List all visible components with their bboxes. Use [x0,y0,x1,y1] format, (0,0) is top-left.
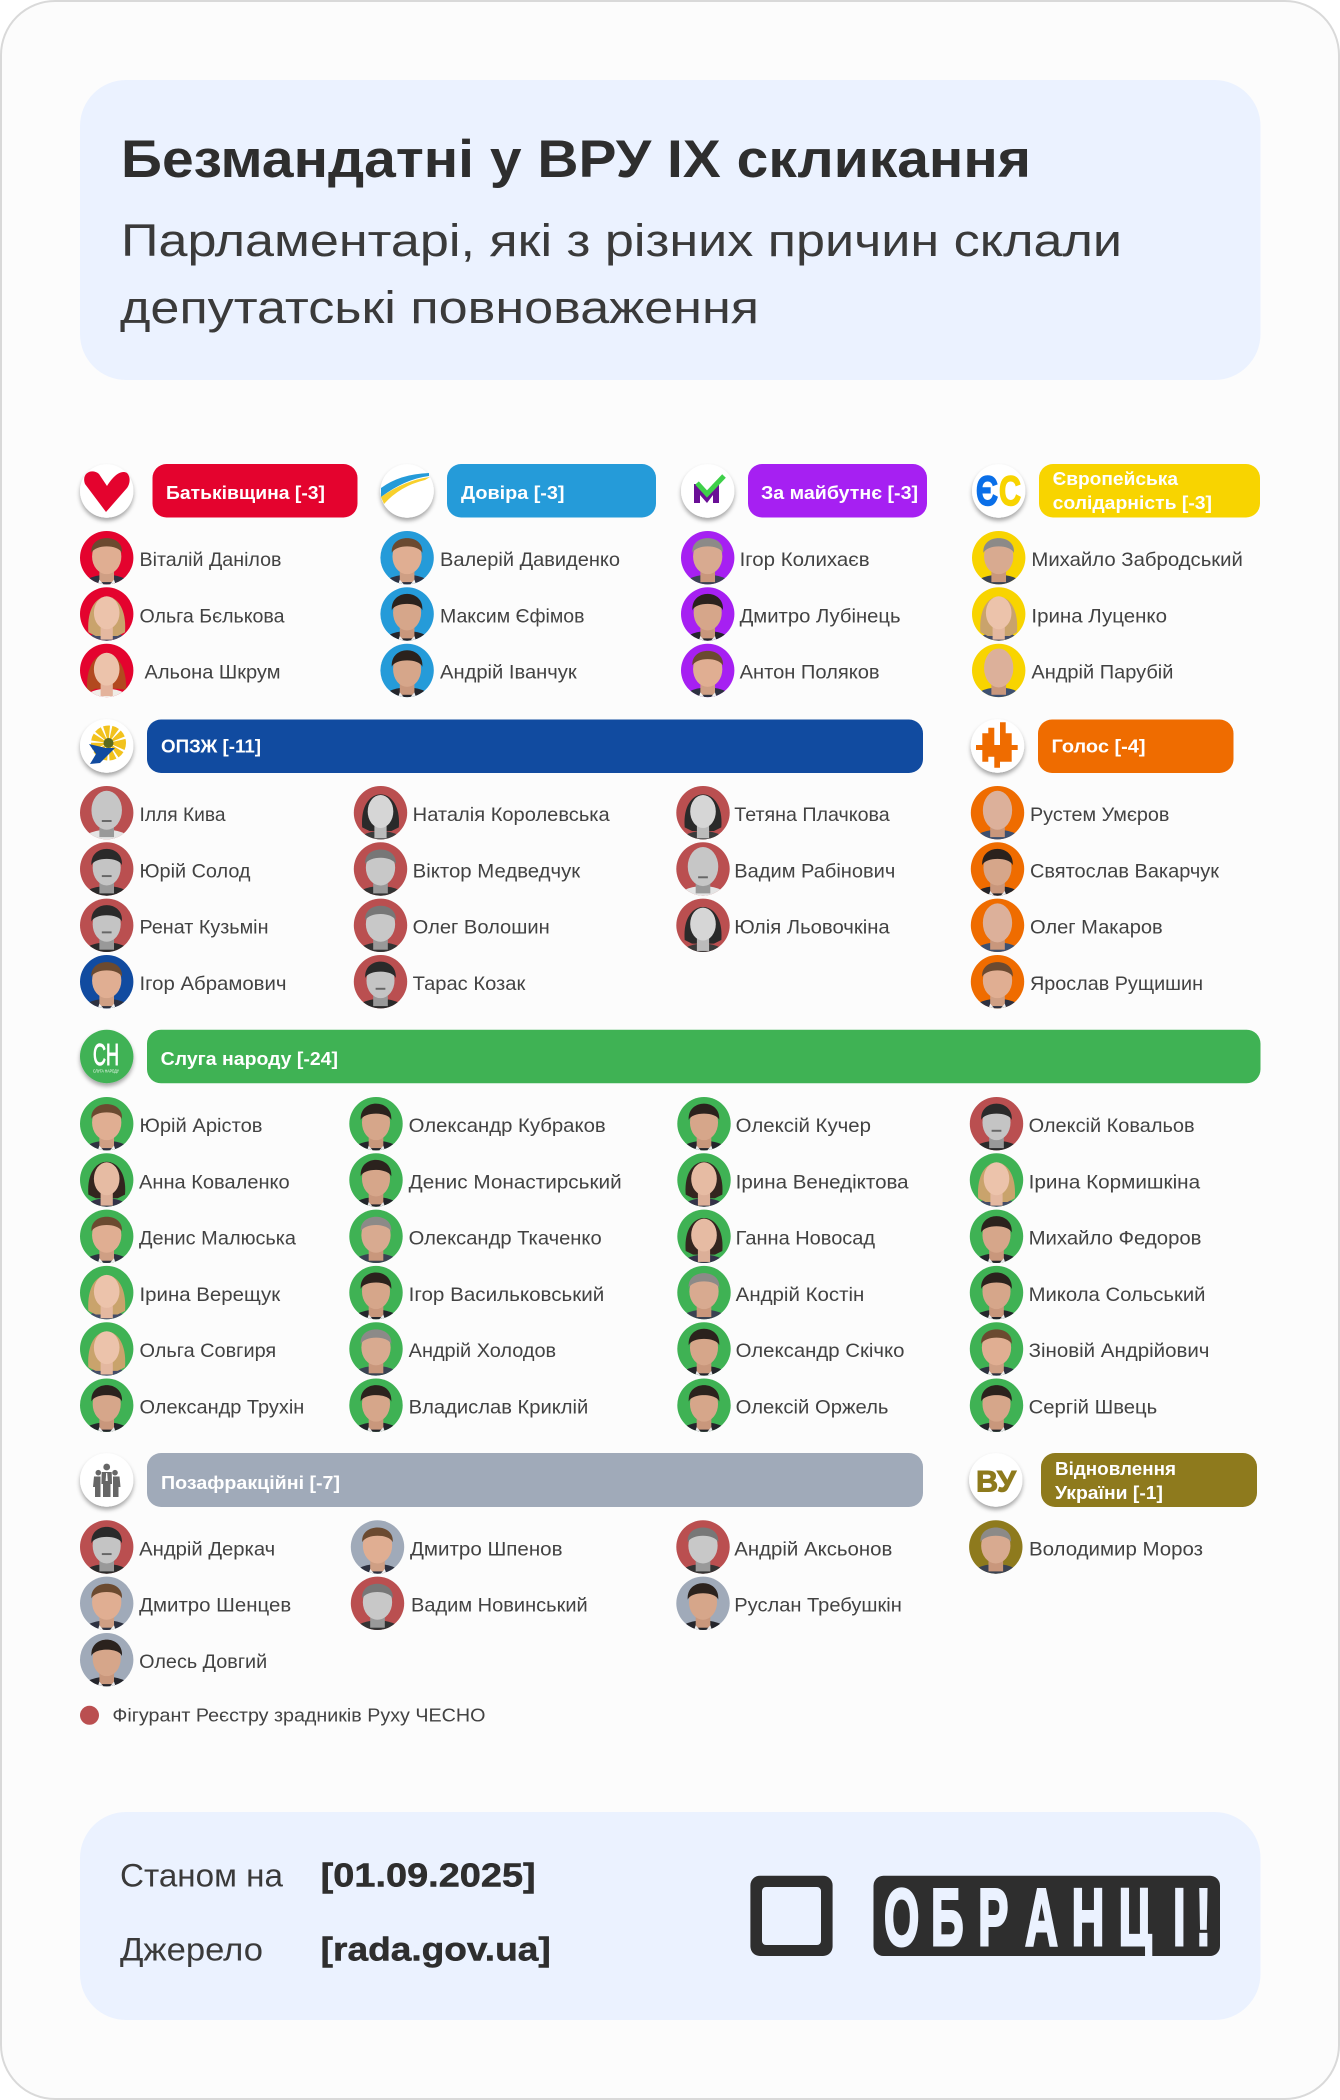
person: Дмитро Шенцев [79,1577,291,1652]
party label: Голос [-4] [1052,736,1146,756]
panel: Голос [969,719,1234,1030]
date label: Станом на [120,1858,283,1894]
party label: Відновлення [1055,1458,1176,1479]
person: Денис Монастирський [348,1153,622,1229]
panel: header [80,80,1260,380]
subtitle: Парламентарі, які з різних причин склали [121,215,1122,266]
panel: Європейська солідарність [971,464,1260,719]
person: Олександр Ткаченко [348,1210,602,1285]
person: Ірина Кормишкіна: Ірина Кормишкіна [1029,1171,1200,1193]
icon: OPZZh sunflower and dove [80,719,133,773]
person: Олександр Трухін: Олександр Трухін [140,1396,304,1418]
person: Віталій Данілов: Віталій Данілов [140,549,282,571]
party label [748,464,927,518]
person: Микола Сольський [968,1266,1206,1341]
person: Михайло Забродський: Михайло Забродський [1031,549,1243,571]
person: Олег Макаров [969,899,1163,974]
person: Ірина Венедіктова: Ірина Венедіктова [736,1171,909,1193]
party label: Слуга народу [-24] [161,1048,338,1069]
party label [1038,720,1234,773]
person: Андрій Холодов: Андрій Холодов [409,1340,556,1362]
party label [1041,1453,1257,1507]
person: Валерій Давиденко: Валерій Давиденко [440,549,620,571]
person: Рустем Умєров [969,786,1169,862]
panel: Позафракційні [79,1453,923,1708]
person: Валерій Давиденко [379,531,620,606]
person: Олександр Скічко [676,1322,905,1398]
person: Святослав Вакарчук: Святослав Вакарчук [1030,860,1219,882]
subtitle: депутатські повноваження [120,282,759,333]
legend: traitor registry: Фігурант Реєстру зрадників Руху ЧЕСНО [112,1706,485,1726]
icon: ES logo [972,464,1025,518]
person: Ганна Новосад [677,1210,876,1284]
logo wordmark: ОБРАНЦІ! [884,1872,1211,1962]
person: Андрій Деркач: Андрій Деркач [139,1538,275,1560]
person: Зіновій Андрійович: Зіновій Андрійович [1029,1340,1210,1362]
person: Олексій Оржель: Олексій Оржель [736,1396,888,1418]
person: Ігор Абрамович [79,955,286,1030]
person: Зіновій Андрійович [968,1322,1210,1398]
title: Безмандатні у ВРУ IX скликання [121,130,1031,189]
party label: ОПЗЖ [-11] [161,736,261,756]
person: Олег Волошин [352,899,550,974]
icon: people group [80,1453,133,1507]
person: Денис Монастирський: Денис Монастирський [409,1171,622,1193]
panel: За майбутнє [680,464,927,719]
person: Олексій Кучер [676,1097,871,1172]
person: Анна Коваленко: Анна Коваленко [139,1171,290,1193]
person: Ірина Венедіктова [677,1153,909,1228]
person: Ігор Колихаєв [680,531,870,606]
person: Ірина Кормишкіна [970,1153,1200,1228]
person: Олексій Оржель [676,1378,888,1454]
person: Альона Шкрум: Альона Шкрум [144,662,280,684]
person: Юрій Арістов: Юрій Арістов [140,1115,262,1137]
person: Микола Сольський: Микола Сольський [1029,1284,1206,1306]
source label: Джерело [120,1932,263,1968]
panel: Слуга народу [79,1030,1260,1454]
person: Ілля Кива: Ілля Кива [140,804,226,826]
person: Ірина Верещук: Ірина Верещук [140,1284,281,1306]
person: Тарас Козак [352,955,526,1030]
person: Віталій Данілов [79,531,282,606]
person: Олексій Кучер: Олексій Кучер [736,1115,871,1137]
person: Ігор Колихаєв: Ігор Колихаєв [740,549,870,571]
person: Андрій Деркач [79,1520,275,1596]
person: Антон Поляков: Антон Поляков [740,662,880,684]
person: Владислав Криклій: Владислав Криклій [409,1396,588,1418]
person: Михайло Федоров: Михайло Федоров [1029,1228,1202,1250]
person: Андрій Аксьонов [675,1520,892,1596]
person: Юлія Льовочкіна [676,899,890,973]
person: Тетяна Плачкова: Тетяна Плачкова [734,804,890,826]
person: Олексій Ковальов [968,1097,1195,1172]
person: Ігор Васильковський [348,1266,604,1341]
person: Ілля Кива [79,786,226,862]
person: Олексій Ковальов: Олексій Ковальов [1029,1115,1195,1137]
icon: Sluha narodu logo [80,1030,133,1083]
icon: VU logo: ВУ [976,1466,1016,1499]
person: Андрій Аксьонов: Андрій Аксьонов [734,1538,892,1560]
panel: Довіра [379,464,656,719]
person: Олександр Скічко: Олександр Скічко [736,1340,905,1362]
person: Андрій Іванчук: Андрій Іванчук [440,662,577,684]
person: Рустем Умєров: Рустем Умєров [1030,804,1169,826]
person: Дмитро Шпенов: Дмитро Шпенов [410,1538,562,1560]
person: Олександр Кубраков: Олександр Кубраков [409,1115,606,1137]
panel: footer [80,1812,1260,2020]
party label [147,1030,1260,1083]
person: Ярослав Рущишин [969,955,1203,1030]
person: Дмитро Шпенов [349,1520,562,1596]
party label [147,1453,923,1507]
source value: [rada.gov.ua] [321,1931,551,1968]
person: Максим Єфімов [379,587,584,663]
person: Михайло Федоров [968,1210,1202,1285]
person: Антон Поляков [680,644,880,719]
person: Михайло Забродський [971,531,1243,606]
icon: ES logo: Є [976,467,998,514]
person: Ольга Совгиря [80,1322,276,1396]
person: Володимир Мороз [968,1520,1203,1596]
person: Ренат Кузьмін [79,899,268,974]
person: Юлія Льовочкіна: Юлія Льовочкіна [734,917,890,939]
party label: Батьківщина [-3] [166,482,325,503]
person: Максим Єфімов: Максим Єфімов [440,605,584,627]
person: Тарас Козак: Тарас Козак [413,973,526,995]
person: Сергій Швець: Сергій Швець [1029,1396,1157,1418]
person: Денис Малюська: Денис Малюська [139,1228,296,1250]
icon: Sluha narodu logo: СЛУГА НАРОДУ [93,1068,119,1074]
person: Андрій Парубій [971,644,1173,719]
icon: Sluha narodu logo: СН [93,1037,119,1072]
person: Вадим Рабінович: Вадим Рабінович [734,860,895,882]
person: Ренат Кузьмін: Ренат Кузьмін [140,917,268,939]
person: Андрій Костін: Андрій Костін [736,1284,864,1306]
person: Дмитро Шенцев: Дмитро Шенцев [139,1595,291,1617]
person: Ігор Абрамович: Ігор Абрамович [140,973,286,995]
person: Вадим Новинський [349,1577,588,1652]
icon: VU logo [969,1453,1022,1507]
party label [447,464,656,518]
person: Юрій Арістов [79,1097,262,1172]
person: Вадим Рабінович [675,842,895,918]
person: Олександр Кубраков [348,1097,606,1172]
person: Олександр Трухін [79,1378,304,1454]
icon: ES logo: С [999,467,1021,514]
panel: Відновлення України [968,1453,1257,1596]
panel: ОПЗЖ [79,719,923,1030]
panel: Батьківщина [79,464,357,718]
person: Денис Малюська [79,1210,296,1285]
person: Олег Волошин: Олег Волошин [413,917,550,939]
person: Олександр Ткаченко: Олександр Ткаченко [409,1228,602,1250]
party label: Довіра [-3] [461,482,564,503]
person: Дмитро Лубінець: Дмитро Лубінець [740,605,901,627]
person: Наталія Королевська [354,786,610,860]
person: Руслан Требушкін: Руслан Требушкін [734,1595,902,1617]
person: Ірина Луценко [972,587,1167,662]
date value: [01.09.2025] [321,1857,536,1894]
party label [1039,464,1260,518]
person: Анна Коваленко [80,1153,290,1228]
icon: logo square [750,1876,833,1956]
person: Тетяна Плачкова [676,786,890,860]
party label: солідарність [-3] [1053,492,1212,513]
person: Олесь Довгий: Олесь Довгий [139,1651,267,1673]
party label [147,720,923,773]
person: Руслан Требушкін [675,1577,902,1652]
person: Вадим Новинський: Вадим Новинський [411,1595,588,1617]
person: Наталія Королевська: Наталія Королевська [413,804,610,826]
person: Дмитро Лубінець [680,587,901,663]
person: Святослав Вакарчук [969,842,1219,918]
person: Ольга Бєлькова: Ольга Бєлькова [140,605,285,627]
person: Олесь Довгий [79,1633,267,1708]
icon: Dovira swoosh [380,464,434,518]
party label: За майбутнє [-3] [761,482,918,503]
party label: Європейська [1053,468,1179,489]
person: Андрій Парубій: Андрій Парубій [1031,662,1173,684]
party label: Позафракційні [-7] [161,1472,340,1493]
person: Андрій Холодов [348,1322,556,1398]
person: Юрій Солод: Юрій Солод [140,860,251,882]
person: Андрій Іванчук [379,644,577,719]
person: Ганна Новосад: Ганна Новосад [736,1228,876,1250]
person: Сергій Швець [968,1378,1157,1454]
person: Ірина Луценко: Ірина Луценко [1031,605,1167,627]
person: Ірина Верещук [80,1266,281,1340]
subtitle [120,215,1122,333]
party label: України [-1] [1055,1482,1163,1503]
person: Владислав Криклій [348,1378,588,1454]
icon: Za maibutnie [681,464,734,518]
person: Ігор Васильковський: Ігор Васильковський [409,1284,604,1306]
person: Віктор Медведчук: Віктор Медведчук [413,860,581,882]
person: Віктор Медведчук [352,842,581,918]
person: Володимир Мороз: Володимир Мороз [1029,1538,1203,1560]
icon: Batkivshchyna heart [80,464,133,518]
person: Андрій Костін [676,1266,864,1341]
person: Ольга Бєлькова [80,587,285,662]
person: Юрій Солод [79,842,251,918]
person: Олег Макаров: Олег Макаров [1030,917,1163,939]
person: Ярослав Рущишин: Ярослав Рущишин [1030,973,1203,995]
person: Ольга Совгиря: Ольга Совгиря [140,1340,276,1362]
party label [152,464,358,518]
person: Альона Шкрум [80,644,280,718]
icon: Holos logo [971,719,1024,773]
